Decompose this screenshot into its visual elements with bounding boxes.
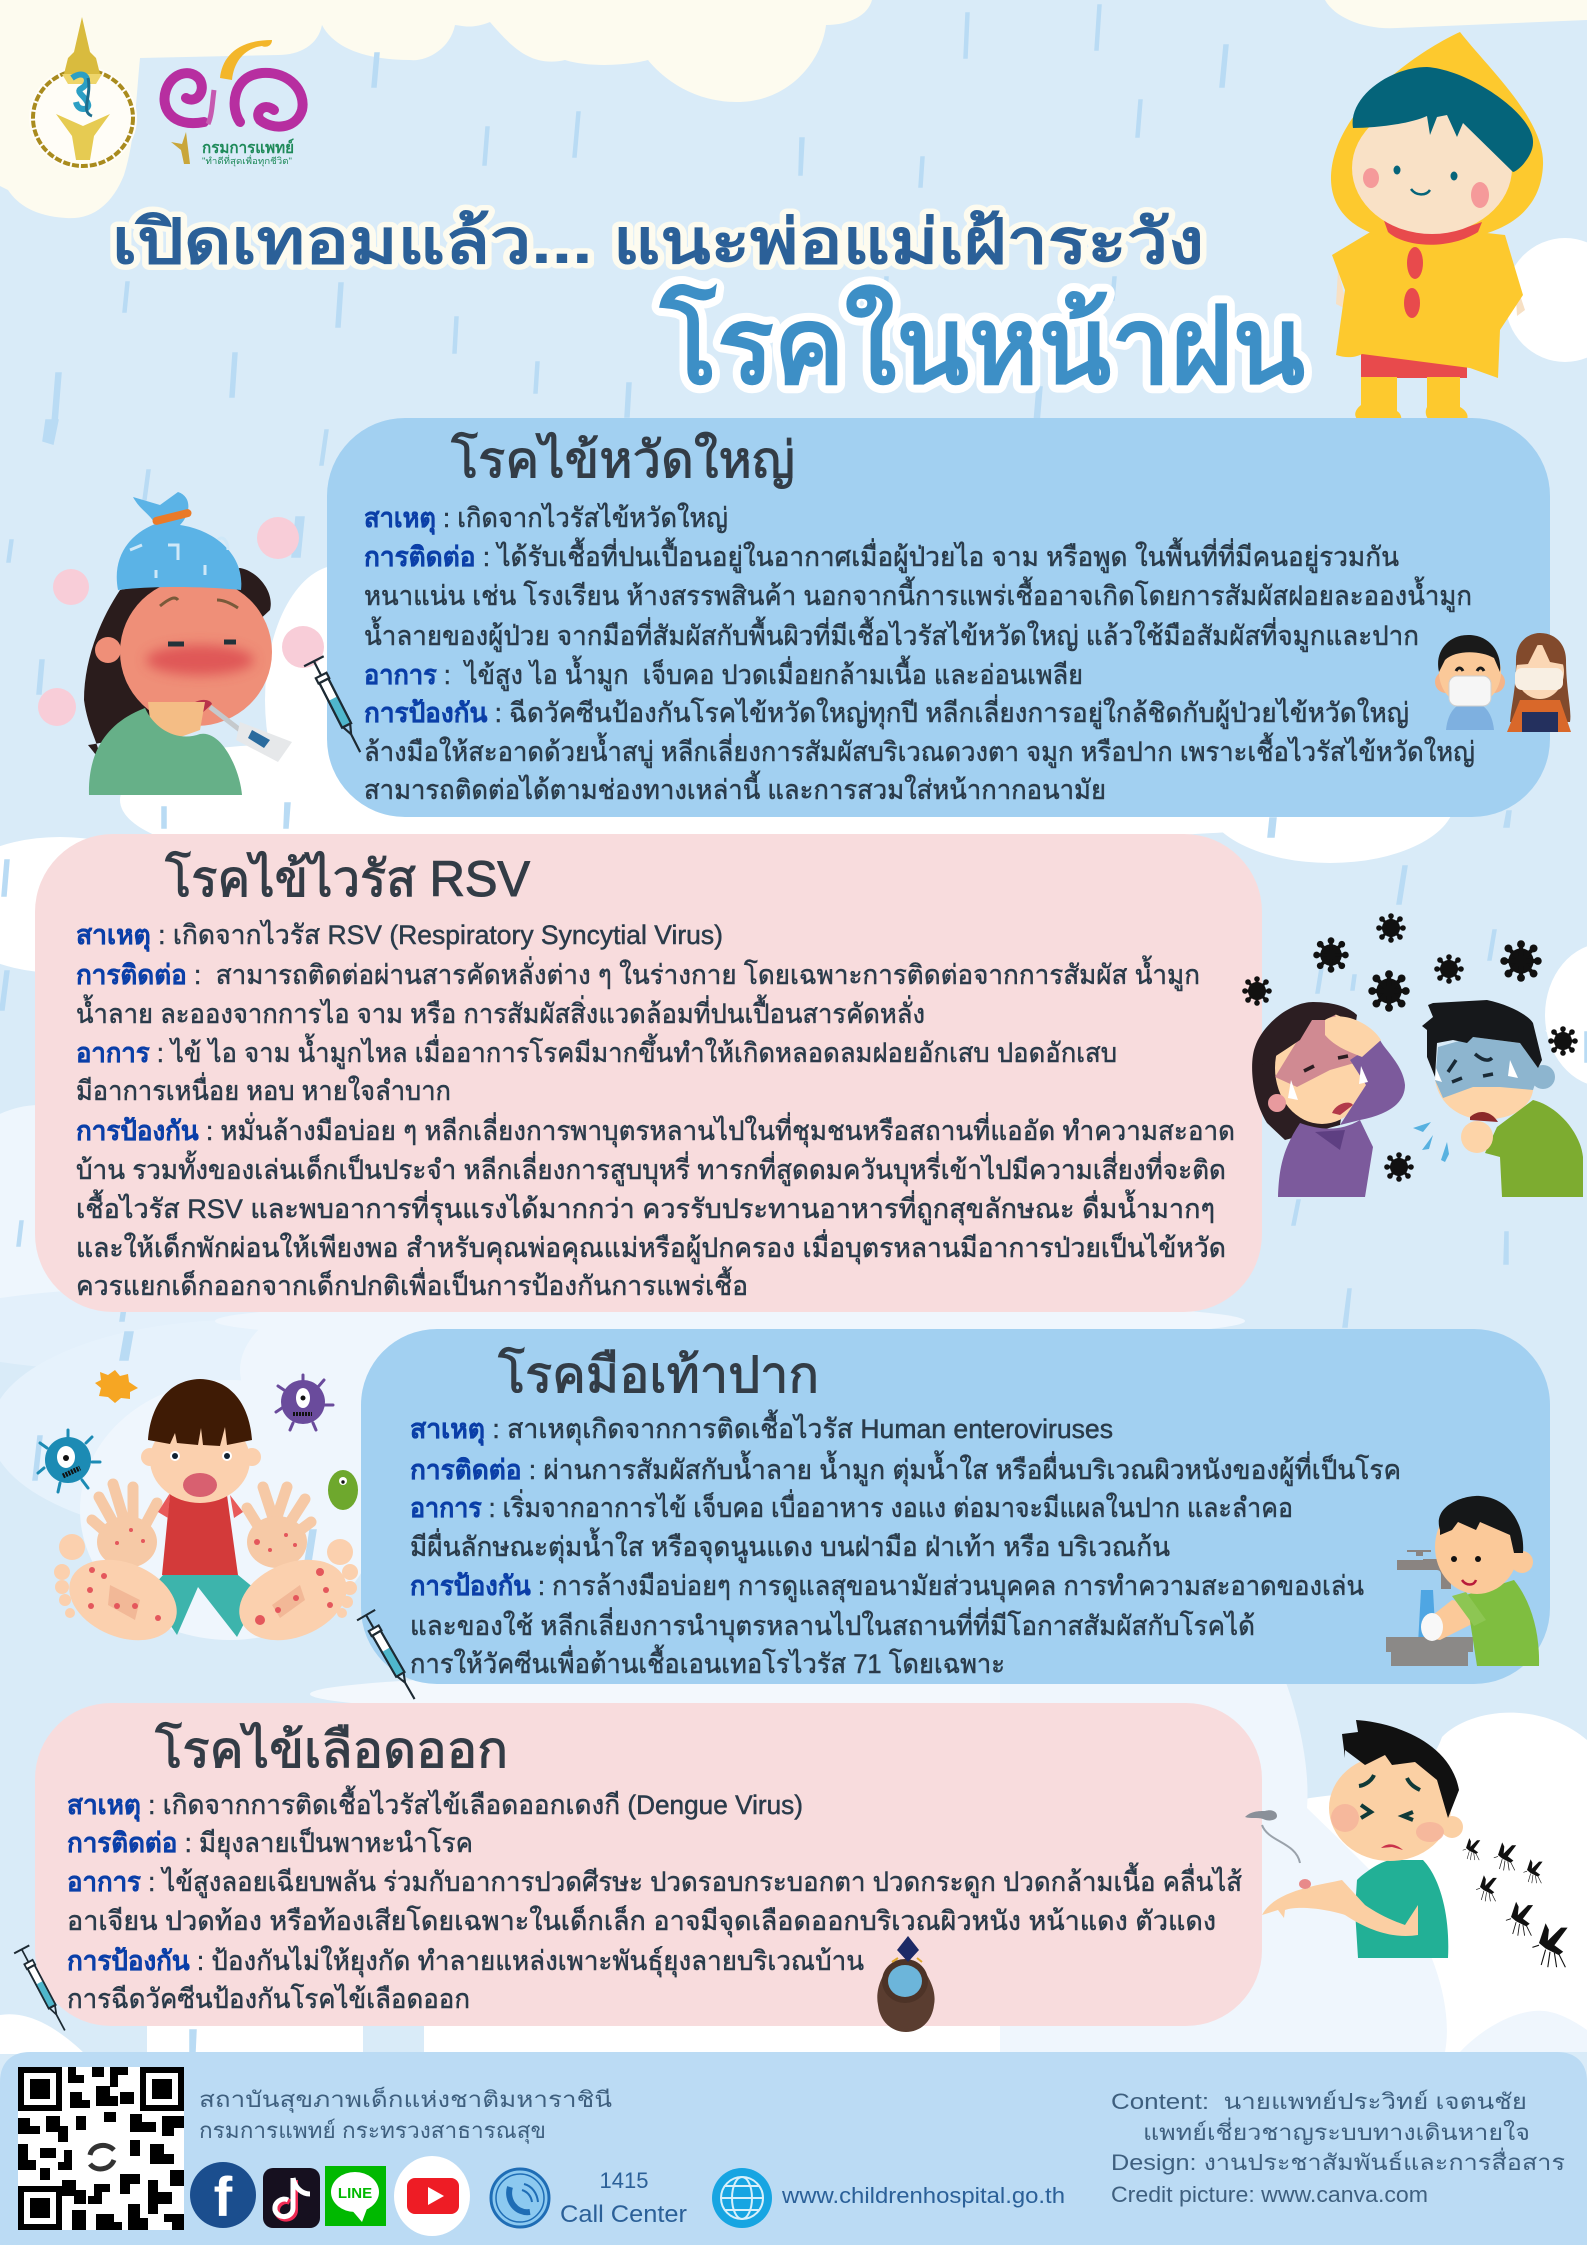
organisation name: สถาบันสุขภาพเด็กแห่งชาติมหาราชินี	[199, 2085, 612, 2113]
icon: syringe dengue	[14, 1945, 72, 2034]
body text: หนาแน่น เช่น โรงเรียน ห้างสรรพสินค้า นอกจากนี้การแพร่เชื้ออาจเกิดโดยการสัมผัสฝอยละอองน้ำมูก	[364, 576, 1472, 612]
body text: การป้องกัน : การล้างมือบ่อยๆ การดูแลสุขอนามัยส่วนบุคคล การทำความสะอาดของเล่น	[410, 1571, 1364, 1603]
body text: การติดต่อ : ได้รับเชื้อที่ปนเปื้อนอยู่ในอากาศเมื่อผู้ป่วยไอ จาม หรือพูด ในพื้นที่ที่มีคนอยู่รวมกัน	[364, 537, 1399, 573]
icon: youtube	[394, 2156, 470, 2236]
illustration: sick child with ice bag and thermometer	[38, 492, 324, 795]
body text: การป้องกัน : ฉีดวัคซีนป้องกันโรคไข้หวัดใหญ่ทุกปี หลีกเลี่ยงการอยู่ใกล้ชิดกับผู้ป่วยไข้หวัดใหญ่	[364, 694, 1409, 730]
body text: สาเหตุ : เกิดจากไวรัส RSV (Respiratory Syncytial Virus)	[76, 920, 723, 952]
feet	[57, 1545, 189, 1655]
logo: anniversary numerals and department: "ทำดีที่สุดเพื่อทุกชีวิต"	[202, 154, 292, 167]
illustration: coughing adults with viruses	[1242, 913, 1583, 1197]
body text	[364, 502, 1475, 805]
call center	[560, 2168, 687, 2228]
body text: และให้เด็กพักผ่อนให้เพียงพอ สำหรับคุณพ่อคุณแม่หรือผู้ปกครอง เมื่อบุตรหลานมีอาการป่วยเป็นไข้หวัด	[76, 1229, 1226, 1265]
panel: dengue	[35, 1703, 1262, 2026]
body text: การป้องกัน : หมั่นล้างมือบ่อย ๆ หลีกเลี่ยงการพาบุตรหลานไปในที่ชุมชนหรือสถานที่แออัด ทำความสะอาด	[76, 1112, 1235, 1148]
panel: RSV	[35, 834, 1262, 1312]
body text: ควรแยกเด็กออกจากเด็กปกติเพื่อเป็นการป้องกันการแพร่เชื้อ	[76, 1266, 748, 1301]
icon: syringe influenza	[304, 656, 370, 757]
title line 2: โรคในหน้าฝน	[659, 283, 1305, 406]
body text: และของใช้ หลีกเลี่ยงการนำบุตรหลานไปในสถานที่ที่มีโอกาสสัมผัสกับโรคได้	[410, 1607, 1255, 1643]
body text: เชื้อไวรัส RSV และพบอาการที่รุนแรงได้มากกว่า ควรรับประทานอาหารที่ถูกสุขลักษณะ ดื่มน้ำมากๆ	[76, 1189, 1215, 1226]
icon: tiktok	[263, 2168, 320, 2228]
body text: การติดต่อ : สามารถติดต่อผ่านสารคัดหลั่งต่าง ๆ ในร่างกาย โดยเฉพาะการติดต่อจากการสัมผัส น้ำมูก	[76, 955, 1200, 991]
body text	[76, 920, 1235, 1301]
icon: line: LINE	[338, 2185, 372, 2202]
body text: สาเหตุ : เกิดจากไวรัสไข้หวัดใหญ่	[364, 502, 728, 535]
body text: มีอาการเหนื่อย หอบ หายใจลำบาก	[76, 1072, 451, 1106]
credits	[1111, 2089, 1565, 2207]
credits: Design: งานประชาสัมพันธ์และการสื่อสาร	[1111, 2147, 1565, 2175]
body text: น้ำลายของผู้ป่วย จากมือที่สัมผัสกับพื้นผิวที่มีเชื้อไวรัสไข้หวัดใหญ่ แล้วใช้มือสัมผัสที่จมูกและปาก	[364, 616, 1419, 652]
body text: มีผื่นลักษณะตุ่มน้ำใส หรือจุดนูนแดง บนฝ่ามือ ฝ่าเท้า หรือ บริเวณก้น	[410, 1527, 1170, 1564]
illustration: boy scratching mosquito bite	[1245, 1720, 1568, 1967]
organisation name: กรมการแพทย์ กระทรวงสาธารณสุข	[199, 2118, 546, 2144]
credits: Credit picture: www.canva.com	[1111, 2182, 1428, 2207]
body text: น้ำลาย ละอองจากการไอ จาม หรือ การสัมผัสสิ่งแวดล้อมที่ปนเปื้อนสารคัดหลั่ง	[76, 994, 925, 1029]
body text: การติดต่อ : มียุงลายเป็นพาหะนำโรค	[67, 1825, 473, 1860]
body text	[67, 1785, 1242, 2014]
logo: institute emblem	[29, 17, 137, 170]
logo: anniversary numerals and department: กรมการแพทย์	[202, 138, 294, 157]
body text: การป้องกัน : ป้องกันไม่ให้ยุงกัด ทำลายแหล่งเพาะพันธุ์ยุงลายบริเวณบ้าน	[67, 1945, 864, 1978]
body text: สามารถติดต่อได้ตามช่องทางเหล่านี้ และการสวมใส่หน้ากากอนามัย	[364, 770, 1106, 805]
body text: อาการ : ไข้ ไอ จาม น้ำมูกไหล เมื่ออาการโรคมีมากขึ้นทำให้เกิดหลอดลมฝอยอักเสบ ปอดอักเสบ	[76, 1033, 1117, 1069]
body text: ล้างมือให้สะอาดด้วยน้ำสบู่ หลีกเลี่ยงการสัมผัสบริเวณดวงตา จมูก หรือปาก เพราะเชื้อไวรัสไข้หวัดใหญ่	[364, 732, 1475, 768]
heading: โรคมือเท้าปาก	[498, 1347, 819, 1403]
logo: anniversary numerals and department	[165, 40, 303, 167]
credits: แพทย์เชี่ยวชาญระบบทางเดินหายใจ	[1143, 2117, 1530, 2145]
heading: โรคไข้เลือดออก	[155, 1722, 508, 1778]
organisation name	[199, 2085, 612, 2144]
icon: water jar with larvae	[877, 1936, 935, 2032]
body text: อาเจียน ปวดท้อง หรือท้องเสียโดยเฉพาะในเด็กเล็ก อาจมีจุดเลือดออกบริเวณผิวหนัง หน้าแดง ตัวแดง	[67, 1903, 1216, 1938]
call center: Call Center	[560, 2201, 687, 2228]
body text: การให้วัคซีนเพื่อต้านเชื้อเอนเทอโรไวรัส 71 โดยเฉพาะ	[410, 1644, 1005, 1679]
panel: influenza	[327, 418, 1550, 817]
icon: phone	[491, 2169, 549, 2227]
body text: การติดต่อ : ผ่านการสัมผัสกับน้ำลาย น้ำมูก ตุ่มน้ำใส หรือผื่นบริเวณผิวหนังของผู้ที่เป็นโรค	[410, 1450, 1401, 1487]
body text: อาการ : ไข้สูงลอยเฉียบพลัน ร่วมกับอาการปวดศีรษะ ปวดรอบกระบอกตา ปวดกระดูก ปวดกล้ามเนื้อ คลื่นไส้	[67, 1862, 1242, 1898]
icon: globe	[712, 2168, 772, 2228]
call center: 1415	[600, 2168, 648, 2193]
panel: hand foot mouth	[361, 1329, 1550, 1684]
credits: Content: นายแพทย์ประวิทย์ เจตนชัย	[1111, 2089, 1527, 2114]
body text	[410, 1409, 1401, 1679]
icon: facebook: f	[214, 2165, 233, 2228]
illustration: boy washing hands	[1386, 1496, 1539, 1666]
icon: line	[325, 2166, 386, 2226]
illustration: child in raincoat	[1331, 32, 1543, 423]
body text: อาการ : ไข้สูง ไอ น้ำมูก เจ็บคอ ปวดเมื่อยกล้ามเนื้อ และอ่อนเพลีย	[364, 655, 1083, 691]
body text: การฉีดวัคซีนป้องกันโรคไข้เลือดออก	[67, 1984, 470, 2014]
body text: สาเหตุ : สาเหตุเกิดจากการติดเชื้อไวรัส Human enteroviruses	[410, 1409, 1113, 1446]
heading: โรคไข้ไวรัส RSV	[165, 851, 531, 907]
body text: สาเหตุ : เกิดจากการติดเชื้อไวรัสไข้เลือดออกเดงกี (Dengue Virus)	[67, 1785, 803, 1822]
body text: อาการ : เริ่มจากอาการไข้ เจ็บคอ เบื่ออาหาร งอแง ต่อมาจะมีแผลในปาก และลำคอ	[410, 1489, 1293, 1523]
title line 1: เปิดเทอมแล้ว... แนะพ่อแม่เฝ้าระวัง	[112, 208, 1204, 277]
QR code	[18, 2067, 184, 2230]
illustration: child with rash and germs	[38, 1370, 359, 1655]
footer panel	[0, 2052, 1587, 2245]
website: www.childrenhospital.go.th	[781, 2183, 1065, 2208]
icon: syringe hand foot mouth	[357, 1610, 424, 1704]
illustration: masked boy and girl	[1435, 633, 1571, 732]
body text: บ้าน รวมทั้งของเล่นเด็กเป็นประจำ หลีกเลี่ยงการสูบบุหรี่ ทารกที่สูดดมควันบุหรี่เข้าไปมีความเสี่ยงที่จะติด	[76, 1150, 1226, 1187]
icon: facebook	[190, 2162, 256, 2228]
hands	[92, 1484, 311, 1540]
heading: โรคไข้หวัดใหญ่	[451, 432, 795, 488]
